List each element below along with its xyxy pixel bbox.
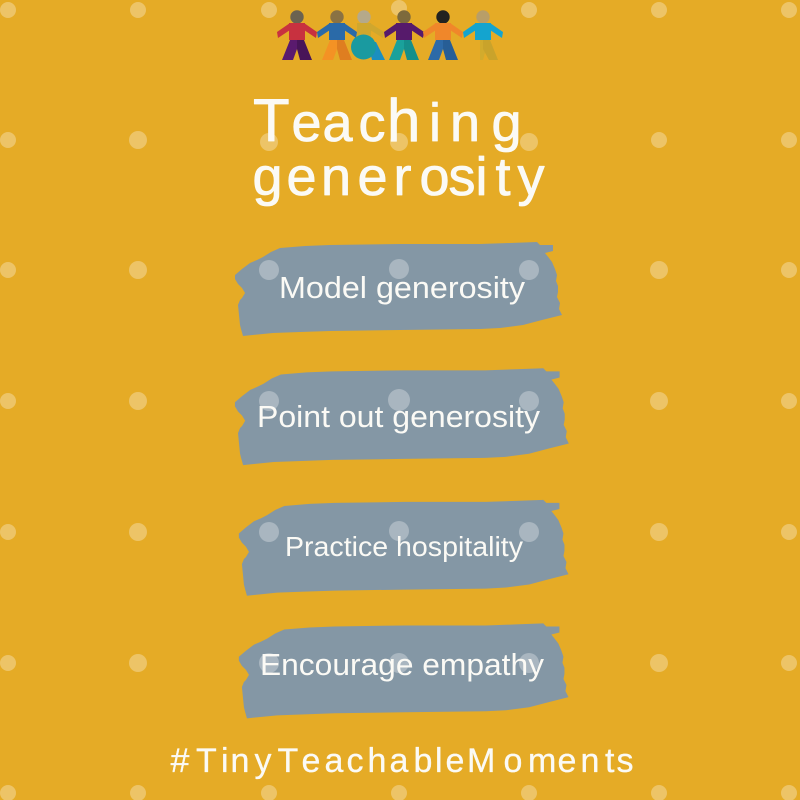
text: model generosity: Model generosity: [279, 270, 526, 305]
text: point out generosity: Point out generosity: [257, 399, 541, 434]
title: generosity: [252, 147, 544, 207]
title: [252, 87, 544, 207]
icon: row of people holding hands: [277, 10, 503, 60]
person 2: [317, 10, 357, 60]
person 4: [384, 10, 424, 60]
text: practice hospitality: Practice hospitality: [285, 531, 523, 562]
person 6: [463, 10, 503, 60]
person 1: [277, 10, 317, 60]
hashtag footer: #TinyTeachableMoments: [170, 742, 634, 780]
text: encourage empathy: Encourage empathy: [260, 647, 544, 682]
person 3 in wheelchair: [351, 10, 385, 60]
panel: brush stroke backgrounds: [235, 242, 569, 718]
title: Teaching: [253, 87, 522, 154]
person 5: [423, 10, 463, 60]
